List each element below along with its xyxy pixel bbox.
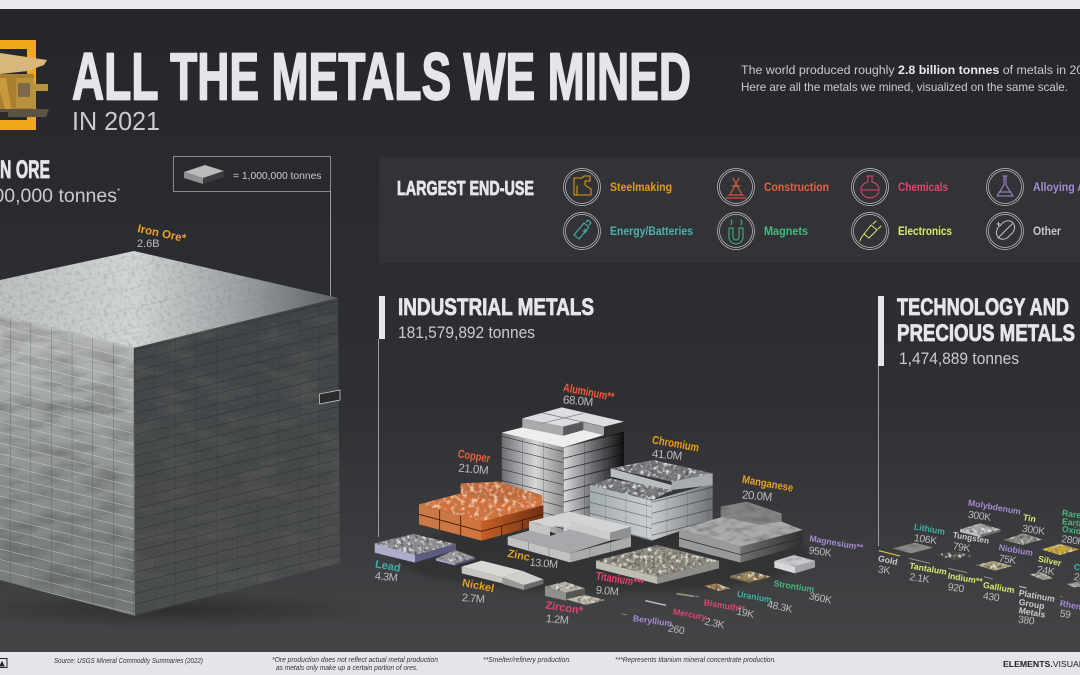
label: manganese: Manganese: [741, 474, 794, 495]
legend: construction: Construction: [764, 182, 829, 194]
label: magnesium: Magnesium**: [809, 533, 865, 553]
label: gold: Gold: [877, 553, 899, 567]
label: titanium: Titanium***: [595, 570, 645, 590]
label: platinum group metals: Platinum: [1018, 588, 1056, 604]
block: rare earth oxides: [1041, 544, 1079, 555]
title: ALL THE METALS WE MINED: [72, 40, 691, 114]
scale block marker on cube: [320, 390, 340, 404]
block: aluminum: [502, 407, 624, 537]
label: beryllium: Beryllium: [632, 613, 673, 629]
block: zinc: [508, 512, 631, 562]
legend: chemicals: [852, 168, 948, 206]
label: gallium: Gallium: [982, 580, 1016, 595]
label: lead: Lead: [374, 558, 401, 575]
label: platinum group metals: [1017, 588, 1056, 628]
label: gold: [877, 553, 899, 577]
label: chromium: [651, 433, 700, 463]
footnote: ore: as metals only make up a certain portion of ores.: [276, 665, 418, 672]
block: gold: [879, 551, 900, 556]
icon: footer logo: [0, 658, 7, 668]
panel: largest end-use: [379, 157, 1080, 263]
label: bismuth: 19K: [735, 607, 755, 621]
label: zinc: 13.0M: [529, 557, 558, 571]
label: platinum group metals: Metals: [1018, 605, 1046, 620]
block: chromium: [590, 460, 713, 541]
legend: other: [986, 212, 1061, 250]
label: platinum group metals: Group: [1018, 597, 1045, 611]
label: tungsten: [952, 529, 990, 555]
block: uranium: [730, 571, 771, 583]
legend: chemicals: Chemicals: [898, 182, 948, 194]
label: molybdenum: 300K: [967, 510, 992, 524]
label: manganese: 20.0M: [741, 488, 772, 504]
label: silver: [1036, 554, 1063, 578]
legend: block scale: = 1,000,000 tonnes: [233, 171, 321, 182]
label: gallium: 430: [982, 591, 1000, 604]
legend: steelmaking: Steelmaking: [610, 182, 672, 194]
label: zircon: Zircon*: [545, 599, 584, 617]
label: molybdenum: Molybdenum: [967, 497, 1022, 517]
label: lithium: Lithium: [913, 521, 946, 537]
label: niobium: 75K: [998, 554, 1017, 567]
label: tungsten: 79K: [952, 541, 971, 555]
block: tin: [1003, 533, 1043, 545]
legend: block scale: [174, 156, 330, 192]
panel heading: LARGEST END-USE: [397, 178, 534, 200]
label: nickel: 2.7M: [461, 592, 485, 606]
chart: technology and precious metals blocks: [877, 497, 1080, 628]
heading: iron ore: *: [117, 187, 120, 196]
block: nickel: [462, 561, 543, 590]
label: platinum group metals: 380: [1017, 614, 1035, 628]
legend: energy/batteries: Energy/Batteries: [610, 226, 693, 238]
legend: energy/batteries: [564, 212, 693, 250]
label: strontium: [773, 578, 833, 607]
heading: industrial metals: [378, 294, 594, 537]
block: copper: [419, 482, 543, 541]
subtitle: IN 2021: [72, 106, 160, 136]
label: uranium: Uranium: [736, 589, 773, 605]
label: strontium: 360K: [808, 591, 833, 607]
label: bismuth: Bismuth**: [703, 597, 746, 614]
iron ore cube: [0, 251, 380, 628]
intro text: [741, 63, 1080, 94]
label: lead: [374, 558, 401, 584]
label: iron ore: 2.6B: [137, 238, 160, 250]
label: zinc: [506, 548, 558, 571]
label: niobium: Niobium: [998, 542, 1034, 558]
legend: construction: [718, 168, 829, 206]
footnote: ore: [272, 657, 438, 672]
block: tungsten: [935, 551, 972, 560]
legend: steelmaking: [564, 168, 672, 206]
label: tin: Tin: [1022, 512, 1037, 524]
heading: industrial metals: INDUSTRIAL METALS: [398, 294, 594, 321]
legend: magnets: [718, 212, 808, 250]
label: silver: Silver: [1037, 554, 1063, 568]
block: bismuth: [704, 583, 731, 591]
label: strontium: Strontium: [773, 578, 815, 594]
icon: mining truck in yellow frame: [0, 40, 49, 130]
label: iron ore: Iron Ore*: [136, 223, 188, 245]
label: magnesium: 950K: [808, 545, 832, 560]
chart: industrial metals blocks: [374, 381, 865, 637]
label: uranium: [736, 589, 794, 616]
heading: iron ore: [0, 156, 120, 207]
block: cadmium: [1067, 581, 1080, 587]
small metal slivers: [909, 558, 1062, 597]
label: nickel: [461, 577, 495, 606]
label: rhenium: 59: [1059, 609, 1072, 621]
legend: electronics: Electronics: [898, 226, 952, 238]
footer band: [0, 652, 1080, 675]
legend: alloying agents: [986, 168, 1080, 206]
top band: [0, 0, 1080, 9]
block: mercury, small metals: [622, 594, 699, 615]
label: indium: Indium**: [947, 570, 984, 587]
label: chromium: Chromium: [651, 433, 700, 455]
label: indium: [947, 570, 984, 595]
label: zinc: Zinc: [506, 548, 531, 564]
label: silver: 24K: [1036, 565, 1055, 578]
label: manganese: [741, 474, 794, 504]
label: copper: [457, 447, 492, 477]
label: titanium: 9.0M: [595, 584, 619, 598]
label: tantalum: Tantalum: [909, 560, 948, 577]
legend: other: Other: [1033, 226, 1061, 238]
label: mercury: [672, 606, 726, 631]
footnote: ore: *Ore production does not reflect actual metal production: [272, 657, 438, 664]
intro text: Here are all the metals we mined, visualized on the same scale.: [741, 81, 1068, 94]
label: zircon: [545, 599, 584, 627]
label: mercury: 2.3K: [703, 617, 726, 631]
legend: magnets: Magnets: [764, 226, 808, 238]
label: niobium: [998, 542, 1034, 567]
label: uranium: 48.3K: [766, 600, 794, 616]
label: nickel: Nickel: [461, 577, 495, 595]
block: strontium: [774, 555, 815, 573]
label: mercury: Mercury: [672, 606, 707, 622]
block: lithium: [893, 543, 933, 553]
label: chromium: 41.0M: [651, 447, 682, 463]
label: beryllium: [632, 613, 686, 637]
label: gold: 3K: [877, 564, 891, 577]
block: niobium: [976, 561, 1013, 571]
label: bismuth: [703, 597, 755, 621]
label: copper: Copper: [457, 447, 492, 465]
block: zircon: [545, 582, 605, 605]
label: tantalum: 2.1K: [909, 572, 930, 586]
footnote: titanium: ***Represents titanium mineral concentrate production.: [615, 657, 776, 664]
label: lithium: 106K: [913, 533, 938, 547]
legend: electronics: [852, 212, 952, 250]
label: aluminum: Aluminum**: [562, 381, 616, 404]
label: zircon: 1.2M: [545, 613, 569, 627]
label: aluminum: 68.0M: [562, 393, 593, 409]
block: manganese: [679, 502, 803, 563]
block: molybdenum: [960, 523, 1001, 537]
block: silver: [1029, 572, 1053, 580]
label: tin: 300K: [1021, 524, 1046, 538]
legend leader line: [330, 191, 332, 392]
label: titanium: [595, 570, 645, 598]
source: Source: USGS Mineral Commodity Summaries (2022): [54, 658, 203, 665]
label: tungsten: Tungsten: [952, 529, 990, 546]
label: lithium: [913, 521, 946, 547]
label: beryllium: 260: [667, 623, 686, 637]
heading: technology and precious metals: [878, 294, 1075, 546]
label: indium: 920: [947, 582, 965, 595]
label: rare earth oxides: [1061, 508, 1080, 548]
label: gallium: [982, 580, 1016, 604]
heading: technology and precious metals: 1,474,889 tonnes: [899, 349, 1019, 368]
heading: industrial metals: 181,579,892 tonnes: [398, 323, 535, 342]
label: copper: 21.0M: [458, 462, 489, 477]
block: titanium: [596, 545, 719, 584]
footnote: smelter: **Smelter/refinery production.: [483, 657, 571, 664]
label: tin: [1021, 512, 1046, 538]
label: tantalum: [909, 560, 948, 586]
block: lead: [375, 534, 475, 565]
label: lead: 4.3M: [374, 570, 398, 584]
